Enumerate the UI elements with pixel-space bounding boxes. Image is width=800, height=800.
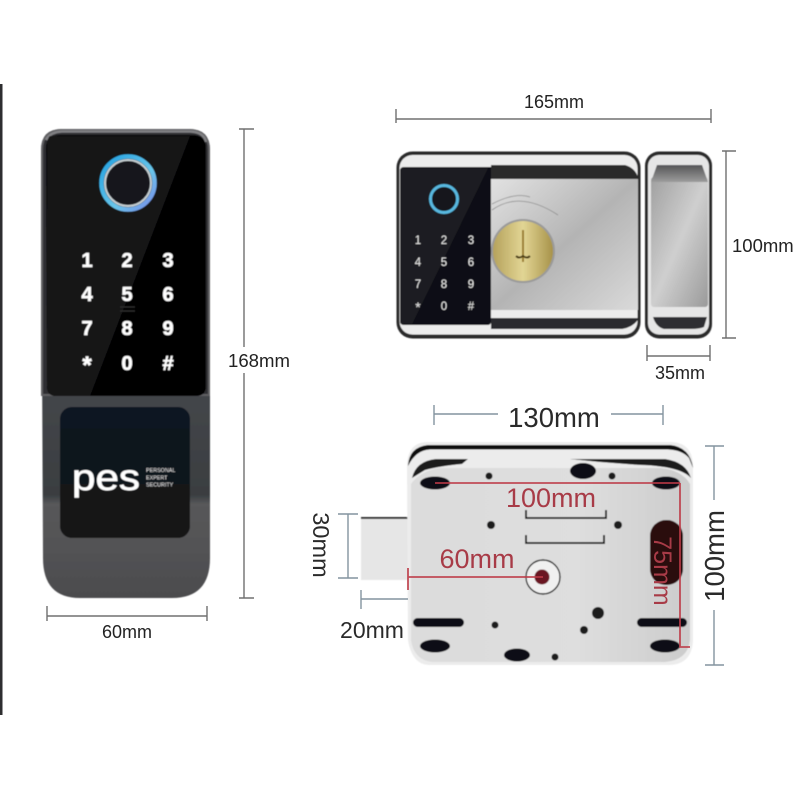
small keypad: 6 bbox=[468, 257, 474, 269]
top rim highlight bbox=[46, 132, 206, 142]
lock casing bbox=[396, 152, 640, 338]
small keypad: 7 bbox=[415, 279, 421, 291]
label: 35mm: 35mm bbox=[655, 363, 705, 383]
small keypad: 3 bbox=[468, 235, 474, 247]
label: 168mm: 168mm bbox=[228, 350, 290, 371]
device: rim lock front view bbox=[396, 152, 712, 338]
metal rim bbox=[42, 130, 209, 395]
keypad: 5 bbox=[121, 284, 133, 306]
logo tagline: PERSONAL bbox=[146, 468, 175, 474]
label: red 100mm: 100mm bbox=[506, 483, 596, 513]
plate slots bbox=[526, 510, 606, 543]
lock body outline bbox=[407, 442, 693, 665]
dimension: 35mm width bbox=[647, 345, 710, 361]
label: 100mm rear: 100mm bbox=[699, 510, 730, 602]
striker inner steel bbox=[651, 177, 708, 307]
device: front keypad lock bbox=[41, 129, 210, 598]
logo tagline: SECURITY bbox=[146, 482, 174, 488]
small keypad: 1 bbox=[415, 235, 421, 247]
small keypad: 8 bbox=[441, 279, 447, 291]
top dark band bbox=[408, 445, 693, 468]
engraving bbox=[492, 196, 558, 215]
keypad: # bbox=[162, 353, 174, 375]
keypad: 3 bbox=[162, 250, 174, 272]
sliding bolt bbox=[361, 517, 409, 580]
keypad: 1 bbox=[81, 250, 93, 272]
small keypad: 5 bbox=[441, 257, 447, 269]
dimension: 20mm bolt length bbox=[361, 590, 408, 609]
panel reflection bbox=[400, 168, 488, 324]
small keypad: 4 bbox=[415, 257, 422, 269]
small keypad bbox=[415, 235, 475, 315]
logo tagline: EXPERT bbox=[146, 476, 168, 482]
dimension: 130mm width bbox=[434, 405, 663, 425]
striker casing bbox=[645, 152, 712, 338]
device: lock rear view bbox=[361, 442, 693, 665]
small keypad: 2 bbox=[441, 235, 447, 247]
keypad: 4 bbox=[81, 284, 93, 306]
glass reflection bbox=[47, 136, 190, 396]
dimension: 30mm bolt height bbox=[338, 514, 358, 578]
striker lower recess bbox=[653, 317, 707, 329]
left edge bar bbox=[0, 84, 2, 715]
keypad: 6 bbox=[162, 284, 174, 306]
small keypad: # bbox=[468, 301, 475, 313]
brushed steel plate bbox=[491, 179, 638, 310]
keypad: * bbox=[82, 352, 92, 379]
small keypad: 9 bbox=[468, 279, 474, 291]
dimension: 100mm height bbox=[722, 151, 736, 338]
label: 165mm: 165mm bbox=[524, 92, 584, 112]
black glass screen bbox=[46, 135, 206, 396]
keypad: 9 bbox=[162, 318, 174, 340]
dimension: 165mm width bbox=[396, 109, 711, 123]
measure: 100mm mount spacing bbox=[435, 482, 680, 484]
label: 20mm: 20mm bbox=[340, 617, 404, 643]
striker face bbox=[648, 155, 709, 334]
label: 30mm: 30mm bbox=[308, 512, 334, 578]
brass cylinder bbox=[491, 219, 555, 283]
striker top shade bbox=[651, 165, 708, 182]
keypad: 7 bbox=[81, 318, 93, 340]
label: 130mm: 130mm bbox=[508, 402, 600, 433]
pes logo: pes bbox=[72, 457, 140, 498]
spindle hole bbox=[526, 560, 560, 594]
label: 60mm: 60mm bbox=[102, 622, 152, 642]
keypad speaker slot bbox=[120, 307, 135, 311]
screws bbox=[486, 472, 622, 660]
bolt top edge bbox=[361, 517, 408, 519]
keypad: 2 bbox=[121, 250, 133, 272]
keypad: 0 bbox=[121, 353, 133, 375]
casing highlight bbox=[400, 155, 638, 334]
keypad panel bbox=[400, 167, 491, 325]
dimension: 168mm height bbox=[239, 129, 254, 598]
dimension: 60mm width bbox=[47, 606, 207, 621]
measure: 60mm backset bbox=[408, 568, 543, 590]
lower shadow band bbox=[491, 318, 639, 329]
label: red 60mm: 60mm bbox=[439, 544, 515, 574]
fingerprint sensor bbox=[102, 156, 154, 210]
small keypad: * bbox=[415, 299, 421, 315]
keypad bbox=[81, 250, 174, 379]
small keypad: 0 bbox=[441, 301, 447, 313]
label: 100mm: 100mm bbox=[732, 235, 794, 256]
mounting holes bbox=[413, 463, 687, 662]
small fingerprint ring bbox=[430, 186, 458, 212]
device body bbox=[41, 129, 210, 598]
measure: 75mm spacing bbox=[680, 483, 690, 647]
upper shadow band bbox=[491, 165, 639, 180]
logo panel bbox=[60, 407, 190, 538]
keypad: 8 bbox=[121, 318, 133, 340]
label: red 75mm: 75mm bbox=[648, 536, 676, 606]
dimension: 100mm height rear bbox=[705, 446, 724, 665]
back plate bbox=[411, 468, 690, 662]
inner top reflection bbox=[412, 459, 691, 478]
